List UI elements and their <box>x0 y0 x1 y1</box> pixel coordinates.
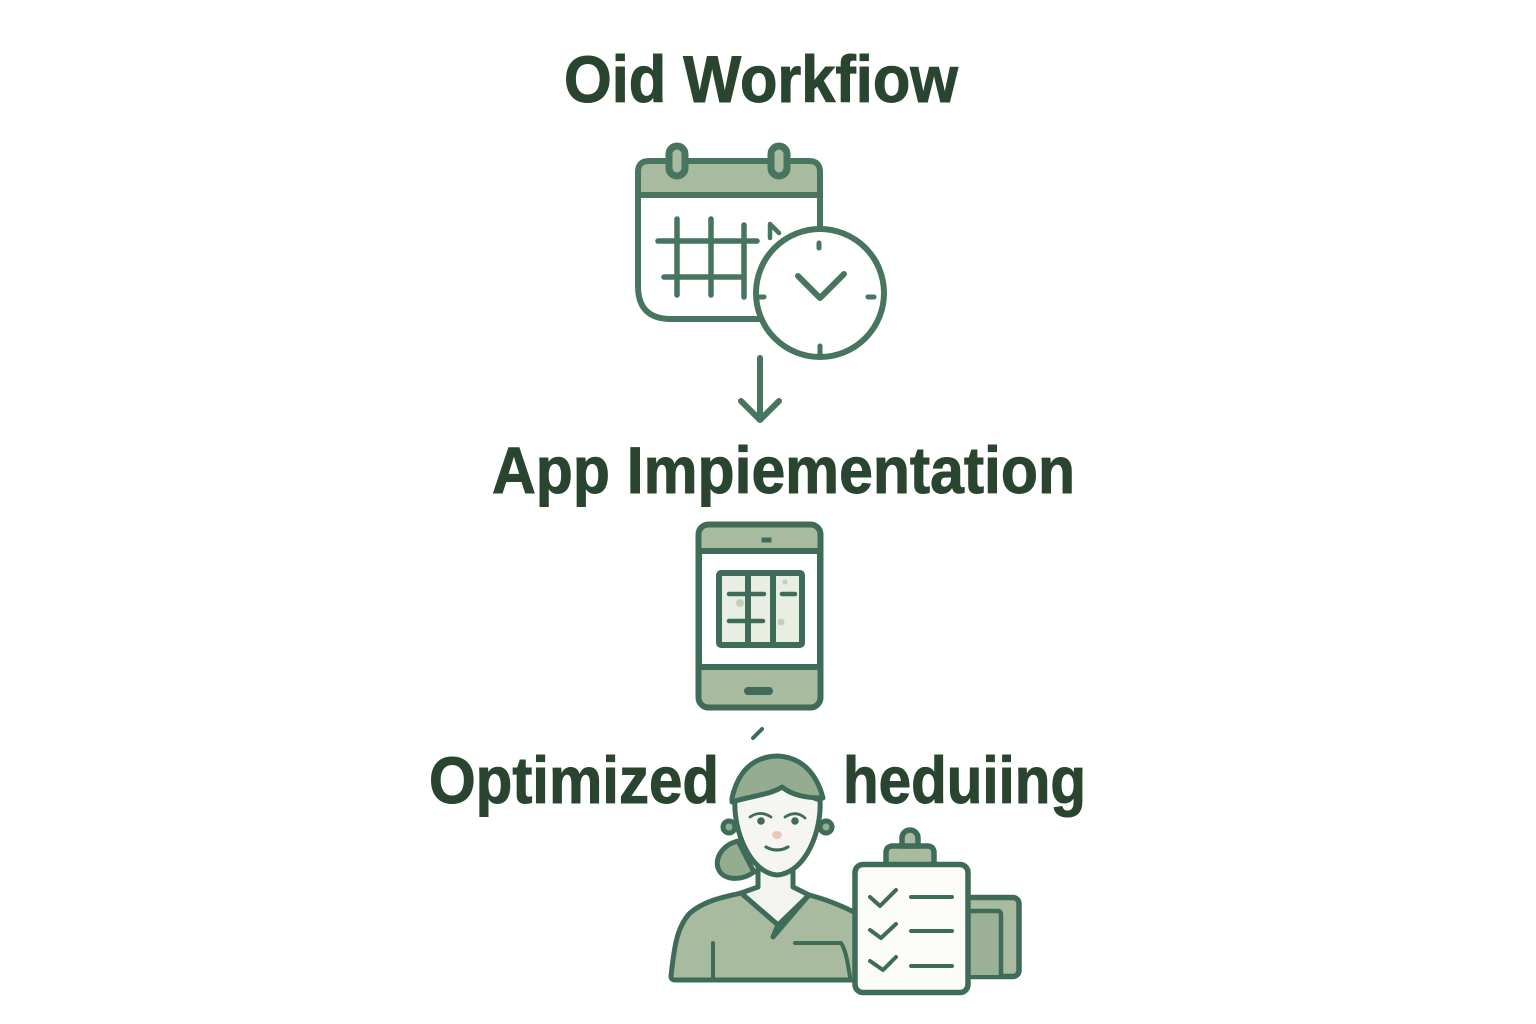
clock hands <box>798 274 844 298</box>
heading: Optimized Scheduling, right: heduiing <box>843 743 1086 817</box>
nose <box>772 831 782 839</box>
schedule table <box>719 573 802 645</box>
calendar header band <box>638 161 820 195</box>
icon: smartphone with schedule <box>698 524 820 708</box>
clock ticks <box>760 243 874 354</box>
calendar body <box>638 195 820 319</box>
calendar grid <box>658 219 757 297</box>
checklist marks and lines <box>870 890 896 970</box>
neck <box>741 868 809 925</box>
torso scrubs <box>671 893 856 980</box>
calendar binding rings <box>669 146 787 176</box>
face <box>735 786 820 875</box>
phone speaker <box>762 538 771 542</box>
hair bun <box>717 841 754 878</box>
clip <box>886 846 934 866</box>
arrow: calendar to app <box>741 358 779 420</box>
eyebrows and eyes <box>750 814 805 850</box>
icon: clipboard checklist with folder <box>855 830 1019 992</box>
icon: nurse <box>671 756 856 980</box>
connector tick <box>753 729 762 738</box>
calendar partial mark <box>770 224 779 238</box>
folder behind <box>950 898 1019 976</box>
clock face <box>756 229 884 357</box>
ears <box>723 821 735 833</box>
phone home button <box>745 688 772 694</box>
title: Oid Workflow: Oid Workfiow <box>564 42 959 116</box>
faded map smudges <box>736 580 788 626</box>
icon: calendar with clock <box>638 146 884 357</box>
phone screen <box>699 551 820 667</box>
heading: Optimized Scheduling, left: Optimized <box>429 743 719 817</box>
folder inner sheet <box>960 911 1001 975</box>
sleeve and pocket lines <box>713 943 850 977</box>
schedule columns and rows <box>748 574 773 644</box>
clipboard sheet <box>855 864 968 992</box>
heading: App Implementation: App Impiementation <box>492 433 1075 507</box>
hair <box>732 756 823 802</box>
phone body <box>698 524 820 708</box>
